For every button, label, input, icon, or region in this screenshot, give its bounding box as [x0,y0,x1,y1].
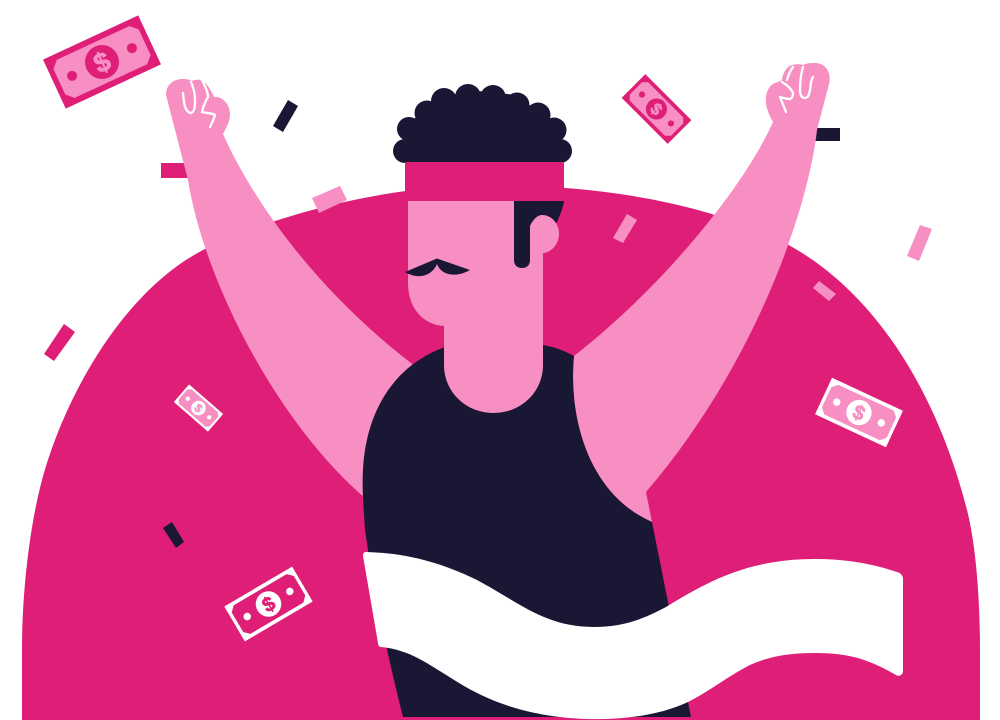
tank top [363,345,691,717]
money bill: bottom left: $ [259,593,280,617]
finish line ribbon [363,552,903,719]
money bill: right [815,378,903,447]
mustache [405,258,470,276]
sideburn [514,201,564,268]
money bill: bottom left [224,567,313,641]
left arm [166,79,420,500]
money bill: top left [43,15,161,109]
money bill: top left: $ [89,46,115,79]
money bill: top center [622,74,691,144]
money bill: left small: $ [191,401,205,416]
money bill: right: $ [849,401,868,426]
money bill: left small [174,384,223,432]
ear [530,215,559,253]
hair [393,84,572,165]
neck and face [408,200,543,413]
money bill: top center: $ [646,99,667,120]
background dome [22,185,980,720]
right arm [573,63,830,522]
headband [405,162,564,201]
confetti group [44,100,932,548]
head and neck [393,84,572,413]
